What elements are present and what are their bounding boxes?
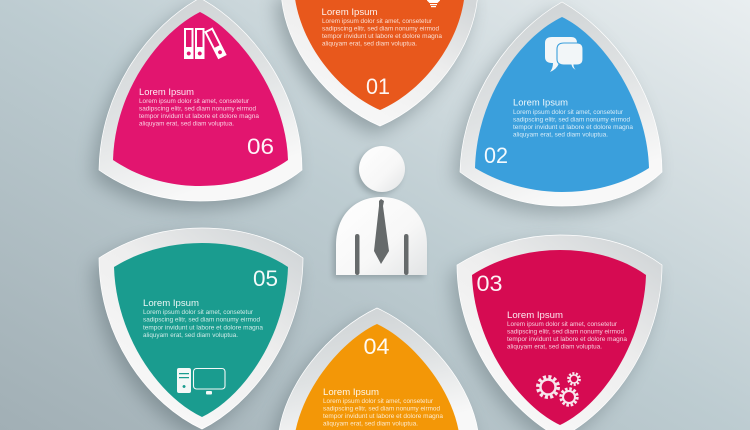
text block 03: Lorem ipsum dolor sit amet, consetetur (507, 321, 617, 328)
icon: gears (538, 374, 580, 405)
number 02: 02 (484, 143, 508, 168)
panel 03: crimson shield (451, 235, 662, 430)
heading 02: Lorem Ipsum (513, 98, 568, 108)
head (359, 146, 405, 192)
text block 03 (507, 321, 628, 350)
text block 01 (322, 18, 443, 48)
tie (374, 199, 389, 264)
text block 06 (139, 98, 260, 128)
right arm line (404, 234, 408, 275)
heading 03: Lorem Ipsum (507, 310, 563, 321)
text block 03: aliquyam erat, sed diam voluptua. (507, 344, 602, 350)
text block 04: sadipscing elitr, sed diam nonumy eirmod (323, 406, 440, 412)
text block 02: tempor invidunt ut labore et dolore magna (513, 124, 634, 131)
text block 02 (513, 109, 634, 138)
number 04: 04 (364, 334, 390, 359)
text block 01: sadipscing elitr, sed diam nonumy eirmod (322, 26, 439, 32)
text block 05: aliquyam erat, sed diam voluptua. (143, 332, 238, 339)
text block 02: Lorem ipsum dolor sit amet, consetetur (513, 109, 623, 116)
text block 05: Lorem ipsum dolor sit amet, consetetur (143, 309, 253, 316)
panel 02: blue rounded triangle (454, 2, 662, 214)
panel 04: amber rounded triangle (272, 308, 479, 430)
torso (336, 197, 427, 275)
text block 01: tempor invidunt ut labore et dolore magna (322, 33, 443, 40)
number 03: 03 (476, 271, 502, 296)
panel 05: teal shield (93, 228, 303, 430)
text block 03: tempor invidunt ut labore et dolore magna (507, 336, 628, 343)
number 05: 05 (253, 266, 278, 291)
text block 02: aliquyam erat, sed diam voluptua. (513, 132, 608, 138)
panel 06: magenta rounded triangle (93, 0, 302, 209)
text block 01: Lorem ipsum dolor sit amet, consetetur (322, 18, 432, 25)
heading 04: Lorem Ipsum (323, 387, 379, 398)
panel 01: orange shield (275, 0, 478, 134)
number 06: 06 (247, 134, 274, 159)
text block 05 (143, 309, 264, 339)
left arm line (355, 234, 360, 275)
icon: binders (184, 27, 227, 59)
heading 01: Lorem Ipsum (322, 7, 378, 18)
text block 05: tempor invidunt ut labore et dolore magna (143, 324, 264, 332)
number 01: 01 (366, 74, 390, 99)
text block 02: sadipscing elitr, sed diam nonumy eirmod (513, 116, 630, 124)
text block 04: aliquyam erat, sed diam voluptua. (323, 420, 418, 428)
central person figure (333, 146, 427, 278)
text block 06: sadipscing elitr, sed diam nonumy eirmod (139, 106, 256, 112)
text block 06: Lorem ipsum dolor sit amet, consetetur (139, 98, 249, 105)
icon: desktop computer (177, 368, 225, 394)
text block 03: sadipscing elitr, sed diam nonumy eirmod (507, 328, 624, 336)
heading 05: Lorem Ipsum (143, 298, 199, 309)
heading 06: Lorem Ipsum (139, 87, 194, 98)
text block 01: aliquyam erat, sed diam voluptua. (322, 40, 417, 48)
text block 06: tempor invidunt ut labore et dolore magna (139, 113, 260, 120)
text block 04 (323, 398, 444, 428)
icon: speech bubbles (545, 37, 583, 72)
text block 06: aliquyam erat, sed diam voluptua. (139, 120, 234, 128)
text block 04: tempor invidunt ut labore et dolore magna (323, 413, 444, 420)
text block 04: Lorem ipsum dolor sit amet, consetetur (323, 398, 433, 405)
icon: light bulb (427, 0, 440, 7)
text block 05: sadipscing elitr, sed diam nonumy eirmod (143, 316, 260, 324)
